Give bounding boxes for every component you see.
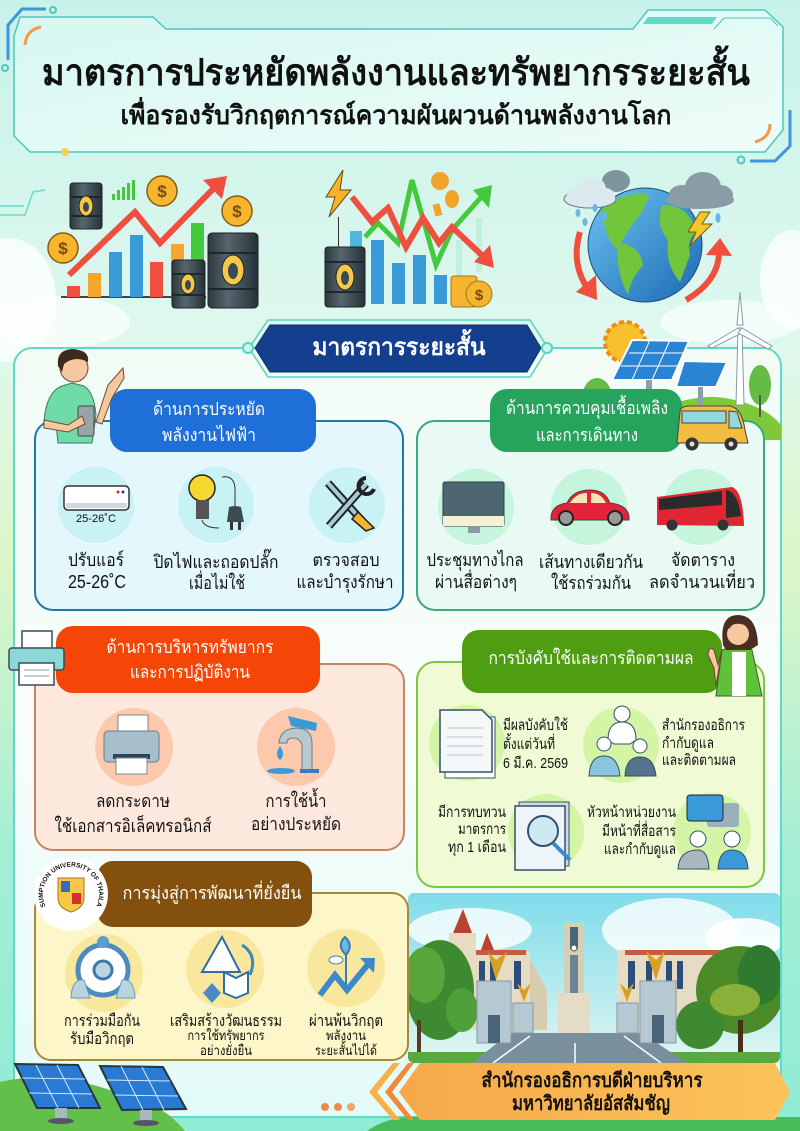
text: shared ride bbox=[539, 552, 643, 593]
heading: fuel and travel: ด้านการควบคุมเชื้อเพลิง bbox=[506, 395, 668, 419]
text: effective date: 6 มี.ค. 2569 bbox=[503, 755, 568, 772]
logo: Assumption University crest bbox=[34, 857, 108, 931]
heading: electricity saving: พลังงานไฟฟ้า bbox=[162, 424, 256, 445]
title: มาตรการประหยัดพลังงานและทรัพยากรระยะสั้น bbox=[42, 45, 750, 93]
icon: school bus bbox=[677, 406, 748, 450]
text: air conditioner: ปรับแอร์ bbox=[68, 550, 124, 570]
icon: culture and book bbox=[186, 930, 264, 1008]
banner: short term measures bbox=[243, 320, 552, 377]
text: reduce trips: ลดจำนวนเที่ยว bbox=[649, 569, 755, 592]
text: review monthly: ทุก 1 เดือน bbox=[448, 839, 506, 857]
illustration: solar and wind bbox=[582, 292, 781, 440]
text: maintenance: ตรวจสอบ bbox=[312, 550, 380, 570]
text: unit heads: หัวหน้าหน่วยงาน bbox=[587, 804, 676, 821]
text: remote meetings: ประชุมทางไกล bbox=[426, 549, 524, 571]
text: review monthly: มาตรการ bbox=[458, 821, 506, 838]
icon: review checklist bbox=[508, 794, 584, 870]
text: pass through crisis: ระยะสั้นไปได้ bbox=[315, 1040, 377, 1058]
illustration: rising oil prices chart: $ bbox=[58, 239, 68, 258]
panel: sustainable development bbox=[34, 857, 409, 1061]
text: lights and plugs bbox=[153, 548, 278, 593]
text: pass through crisis: พลังงาน bbox=[326, 1028, 366, 1043]
character: woman bbox=[708, 615, 762, 696]
icon: light bulb and plug bbox=[178, 467, 254, 543]
text: shared ride: เส้นทางเดียวกัน bbox=[539, 552, 643, 572]
text: water saving bbox=[251, 788, 341, 834]
heading: fuel and travel bbox=[490, 389, 682, 452]
illustration: volatile market chart bbox=[325, 170, 494, 307]
text: cooperation: รับมือวิกฤต bbox=[70, 1030, 134, 1048]
icon: documents bbox=[429, 705, 505, 781]
header panel bbox=[2, 7, 790, 164]
illustration: globe and storm bbox=[564, 170, 734, 302]
heading: electricity saving bbox=[110, 389, 316, 452]
text: air conditioner: 25-26˚C bbox=[68, 572, 126, 592]
text: maintenance: และบำรุงรักษา bbox=[296, 572, 394, 593]
text: vice president office: กำกับดูแล bbox=[662, 735, 714, 752]
illustration: rising oil prices chart: $ bbox=[232, 202, 242, 221]
heading: resource management bbox=[56, 626, 320, 693]
panel: fuel and travel bbox=[417, 389, 764, 610]
icon: solar panels bbox=[15, 1064, 186, 1126]
main panel bbox=[14, 348, 781, 1117]
text: culture bbox=[170, 1012, 282, 1058]
logo: Assumption University crest: ASSUMPTION UNIVERSITY OF THAILAND bbox=[38, 862, 104, 908]
text: effective date: ตั้งแต่วันที่ bbox=[503, 733, 555, 753]
text: effective date: มีผลบังคับใช้ bbox=[503, 716, 568, 734]
text: water saving: อย่างประหยัด bbox=[251, 814, 341, 834]
heading: sustainable development: การมุ่งสู่การพัฒนาที่ยั่งยืน bbox=[122, 880, 302, 904]
icon: executives bbox=[583, 706, 659, 783]
icon: growth through crisis bbox=[307, 929, 385, 1007]
text: unit heads: และกำกับดูแล bbox=[604, 841, 676, 858]
text: remote meetings bbox=[426, 549, 524, 592]
heading: enforcement bbox=[462, 630, 722, 693]
footer banner: สำนักรองอธิการบดีฝ่ายบริหาร bbox=[482, 1069, 703, 1092]
footer banner: มหาวิทยาลัยอัสสัมชัญ bbox=[512, 1093, 670, 1115]
heading: fuel and travel: และการเดินทาง bbox=[536, 425, 638, 445]
panel: electricity saving bbox=[35, 389, 403, 610]
text: review monthly bbox=[438, 804, 506, 857]
icon: monitor bbox=[438, 469, 514, 545]
heading: resource management: และการปฏิบัติงาน bbox=[130, 662, 250, 682]
footer banner bbox=[369, 1063, 790, 1120]
text: review monthly: มีการทบทวน bbox=[438, 804, 506, 821]
icon: printer bbox=[95, 708, 173, 786]
heading: resource management: ด้านการบริหารทรัพยากร bbox=[106, 637, 274, 657]
text: paper reduction: ลดกระดาษ bbox=[96, 791, 170, 811]
text: vice president office bbox=[662, 717, 745, 769]
text: paper reduction bbox=[54, 791, 212, 836]
text: vice president office: และติดตามผล bbox=[662, 752, 736, 769]
banner: short term measures: มาตรการระยะสั้น bbox=[312, 328, 486, 361]
text: lights and plugs: ปิดไฟและถอดปลั๊ก bbox=[153, 548, 278, 572]
text: cooperation bbox=[64, 1012, 140, 1048]
text: shared ride: ใช้รถร่วมกัน bbox=[551, 572, 631, 593]
text: maintenance bbox=[296, 550, 394, 593]
text: air conditioner bbox=[68, 550, 126, 592]
text: water saving: การใช้น้ำ bbox=[266, 788, 326, 811]
icon: small printer bbox=[9, 631, 64, 685]
icon: red bus bbox=[657, 469, 744, 545]
text: reduce trips bbox=[649, 550, 755, 592]
text: cooperation: การร่วมมือกัน bbox=[64, 1012, 140, 1030]
heading: electricity saving: ด้านการประหยัด bbox=[153, 399, 265, 419]
decoration: bottom green hills bbox=[0, 1078, 800, 1131]
text: culture: เสริมสร้างวัฒนธรรม bbox=[170, 1012, 282, 1030]
text: unit heads bbox=[587, 804, 676, 858]
text: effective date bbox=[503, 716, 568, 772]
illustration: rising oil prices chart: $ bbox=[157, 182, 167, 201]
illustration: rising oil prices chart bbox=[48, 176, 258, 308]
panel: resource management bbox=[9, 626, 404, 850]
icon: air conditioner bbox=[58, 467, 134, 543]
subtitle: เพื่อรองรับวิกฤตการณ์ความผันผวนด้านพลังงานโลก bbox=[120, 96, 672, 130]
text: remote meetings: ผ่านสื่อต่างๆ bbox=[435, 569, 517, 592]
icon: people talking bbox=[673, 793, 751, 871]
illustration: volatile market chart: $ bbox=[475, 287, 484, 304]
text: pass through crisis bbox=[309, 1012, 383, 1058]
icon: crossed tools bbox=[309, 467, 385, 543]
text: unit heads: มีหน้าที่สื่อสาร bbox=[602, 820, 676, 840]
character: man with tablet bbox=[44, 349, 124, 443]
heading: enforcement: การบังคับใช้และการติดตามผล bbox=[488, 647, 694, 668]
text: culture: อย่างยั่งยืน bbox=[200, 1041, 252, 1058]
text: paper reduction: ใช้เอกสารอิเล็คทรอนิกส์ bbox=[54, 814, 212, 836]
heading: sustainable development bbox=[97, 861, 312, 927]
text: reduce trips: จัดตาราง bbox=[671, 550, 735, 570]
icon: air conditioner: 25-26˚C bbox=[76, 513, 116, 525]
icon: red car bbox=[551, 469, 629, 545]
text: pass through crisis: ผ่านพ้นวิกฤต bbox=[309, 1012, 383, 1030]
text: culture: การใช้ทรัพยากร bbox=[188, 1027, 264, 1043]
text: vice president office: สำนักรองอธิการ bbox=[662, 717, 745, 734]
text: lights and plugs: เมื่อไม่ใช้ bbox=[189, 570, 245, 593]
illustration: university campus bbox=[405, 893, 785, 1063]
panel: enforcement and monitoring bbox=[417, 615, 764, 887]
icon: water tap bbox=[257, 708, 335, 786]
icon: collaboration bbox=[65, 934, 143, 1012]
decoration: three dots bbox=[321, 1103, 355, 1111]
